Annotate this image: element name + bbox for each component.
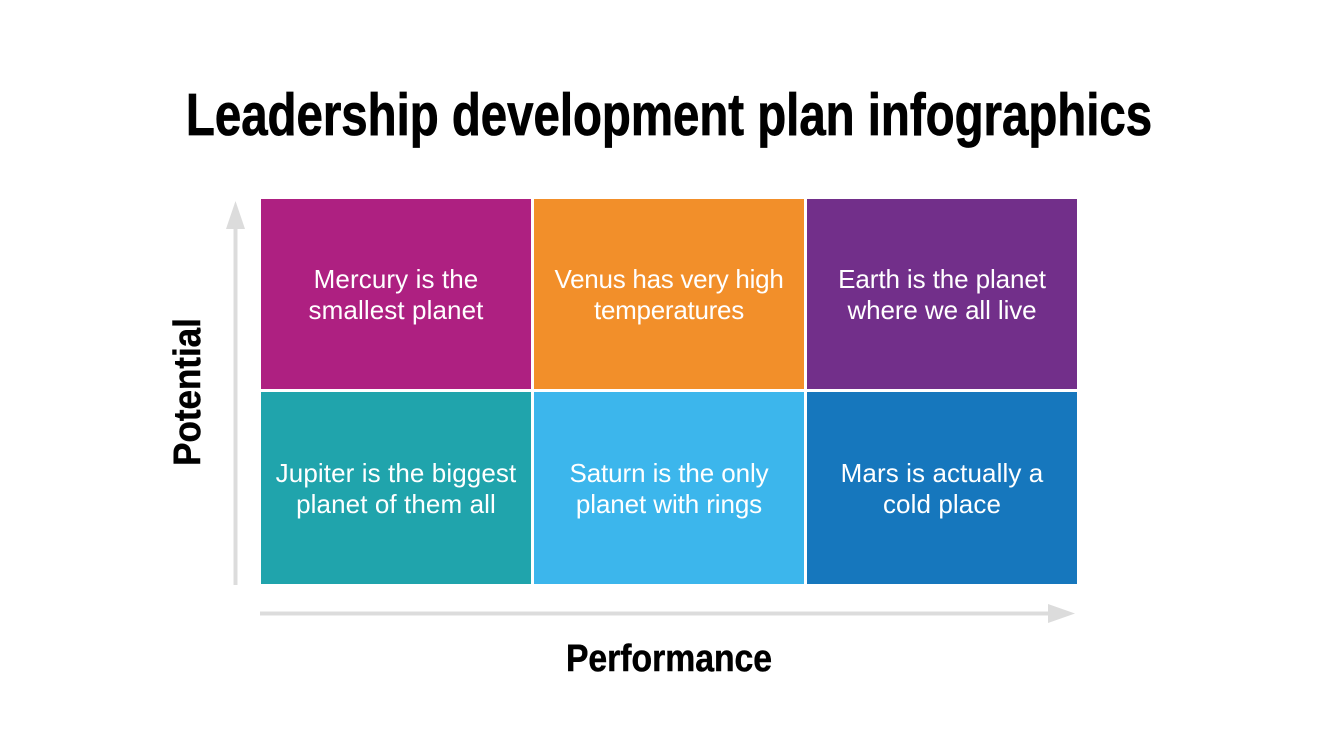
panel: Saturn	[534, 392, 804, 584]
panel: Earth: Earth is the planet	[838, 264, 1046, 294]
panel: Mars: Mars is actually a	[841, 458, 1043, 488]
panel: Earth: where we all live	[847, 295, 1037, 325]
panel: Mercury	[261, 199, 531, 389]
panel: Mercury: smallest planet	[309, 295, 483, 325]
panel: Mercury: Mercury is the	[314, 264, 478, 294]
panel: Venus: Venus has very high	[554, 264, 784, 294]
title: Leadership development plan infographics	[186, 82, 1152, 148]
panel: Venus: temperatures	[594, 295, 744, 325]
arrow: potential axis	[226, 202, 245, 585]
panel: Mars: cold place	[883, 489, 1001, 519]
axis label: Potential: Potential	[167, 318, 209, 465]
axis label: Performance: Performance	[566, 638, 772, 680]
panel: Mars	[807, 392, 1077, 584]
panel: Jupiter: Jupiter is the biggest	[276, 458, 516, 488]
panel: Saturn: planet with rings	[576, 489, 762, 519]
panel: Jupiter: planet of them all	[296, 489, 496, 519]
arrow: performance axis	[260, 604, 1074, 623]
panel: Venus	[534, 199, 804, 389]
panel: Saturn: Saturn is the only	[569, 458, 769, 488]
panel: Jupiter	[261, 392, 531, 584]
panel: Earth	[807, 199, 1077, 389]
